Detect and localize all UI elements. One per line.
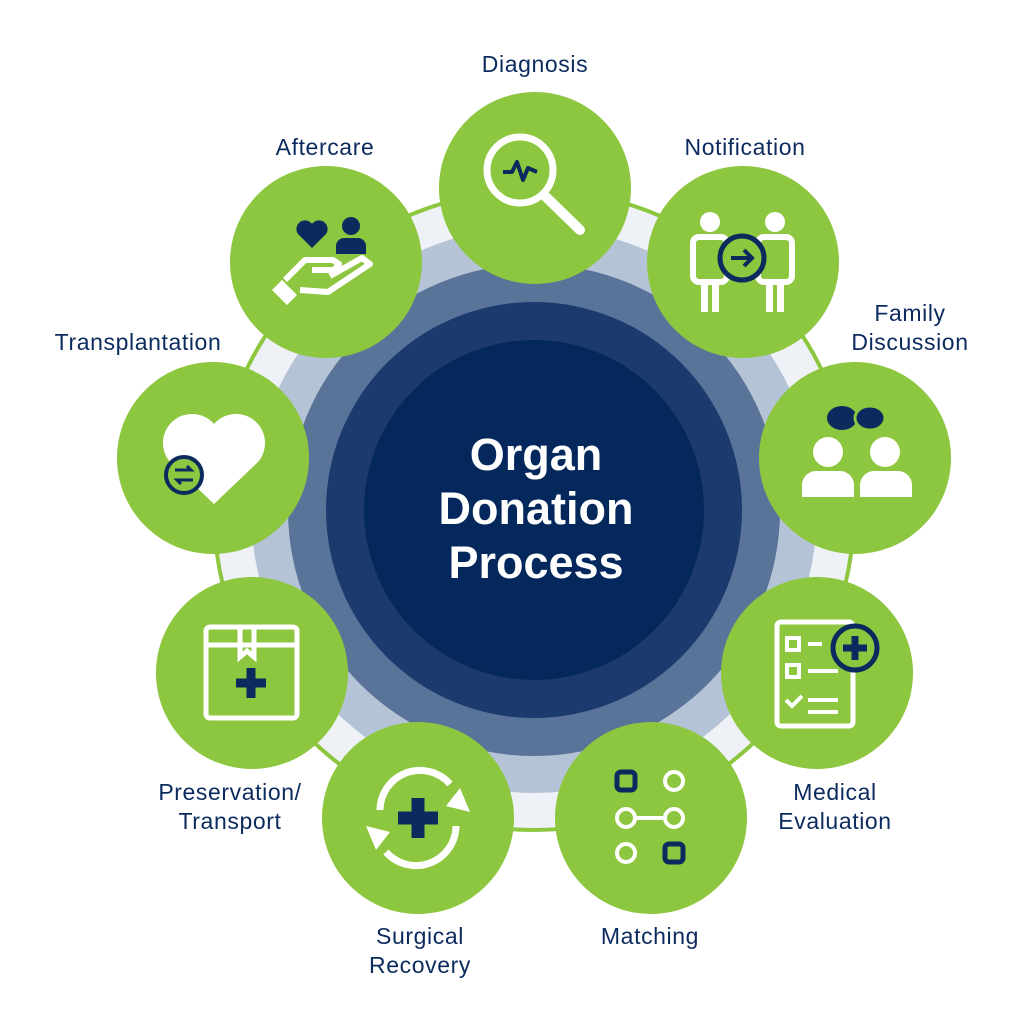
title: Organ bbox=[470, 429, 602, 480]
outer ring bbox=[214, 190, 854, 830]
label: preservation: Transport bbox=[178, 808, 281, 834]
label: preservation: Preservation/ bbox=[158, 779, 302, 805]
label: surgical recovery: Surgical bbox=[376, 923, 464, 949]
title: Process bbox=[448, 537, 624, 588]
step: transplantation bbox=[117, 362, 309, 554]
step: medical evaluation bbox=[721, 577, 913, 769]
label: preservation bbox=[158, 779, 302, 834]
label: family discussion: Discussion bbox=[851, 329, 969, 355]
label: family discussion: Family bbox=[874, 300, 946, 326]
step: aftercare bbox=[230, 166, 422, 358]
label: medical evaluation: Medical bbox=[793, 779, 877, 805]
label: diagnosis: Diagnosis bbox=[482, 51, 588, 77]
label: notification: Notification bbox=[684, 134, 805, 160]
label: medical evaluation bbox=[778, 779, 892, 834]
label: transplantation: Transplantation bbox=[55, 329, 221, 355]
label: surgical recovery bbox=[369, 923, 471, 978]
step: notification bbox=[647, 166, 839, 358]
label: matching: Matching bbox=[601, 923, 699, 949]
step: preservation bbox=[156, 577, 348, 769]
label: family discussion bbox=[851, 300, 969, 355]
label: surgical recovery: Recovery bbox=[369, 952, 471, 978]
title: Donation bbox=[439, 483, 633, 534]
label: aftercare: Aftercare bbox=[276, 134, 374, 160]
step: family discussion bbox=[759, 362, 951, 554]
step: diagnosis bbox=[439, 92, 631, 284]
step: matching bbox=[555, 722, 747, 914]
label: medical evaluation: Evaluation bbox=[778, 808, 892, 834]
step: surgical recovery bbox=[322, 722, 514, 914]
